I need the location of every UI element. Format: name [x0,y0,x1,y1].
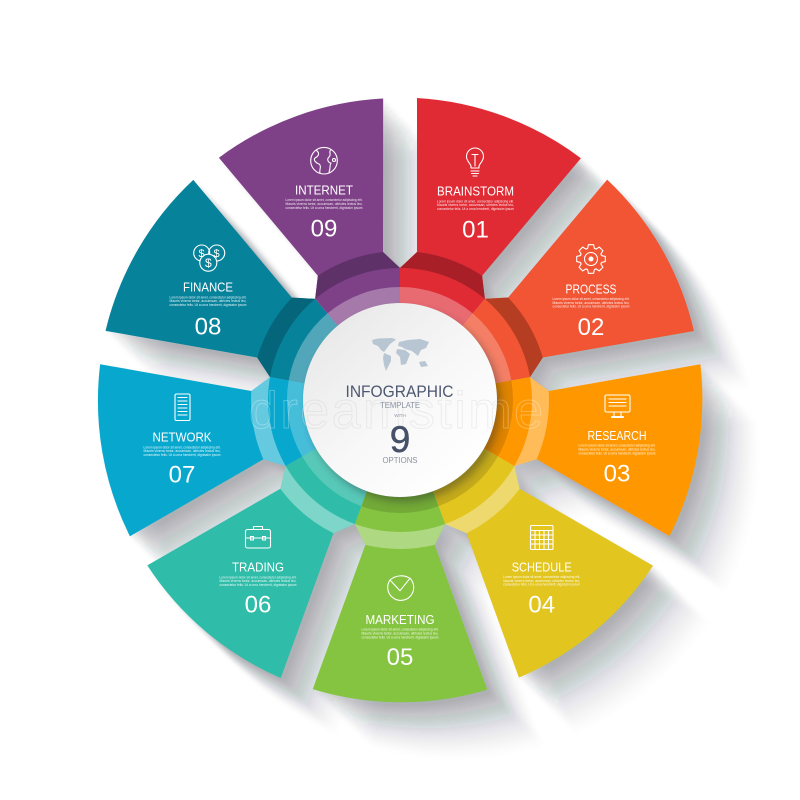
body text: research: Lorem ipsum dolor sit amet, consectetur adipiscing elit. [578,444,656,448]
number: 05: 05 [387,644,413,671]
label: options: OPTIONS [382,456,418,465]
panel: center circle [303,303,497,497]
body text: trading [220,575,296,587]
title: internet: INTERNET [295,184,353,198]
panel: 05 marketing [254,465,503,746]
body text: brainstorm: consectetur felis. Ut a urna hendrerit, dignissim ipsum [437,207,514,211]
number: 09: 09 [311,216,337,243]
body text: internet: consectetur felis. Ut a urna hendrerit, dignissim ipsum [286,206,362,210]
icon: light bulb [466,148,484,176]
number: 01: 01 [462,216,489,243]
icon: calendar [530,526,553,550]
body text: internet: Lorem ipsum dolor sit amet, consectetur adipiscing elit. [286,198,362,202]
body text: trading: Mauris viverra tortor, accumsan, ultricies lectus leo, [220,579,296,583]
label: with: WITH [394,413,406,418]
body text: process: Lorem ipsum dolor sit amet, consectetur adipiscing elit. [552,297,630,301]
body text: trading: Lorem ipsum dolor sit amet, consectetur adipiscing elit. [220,575,296,579]
body text: schedule: consectetur felis. Ut a urna hendrerit, dignissim ipsum [503,583,580,587]
body text: trading: consectetur felis. Ut a urna hendrerit, dignissim ipsum [220,583,296,587]
icon: coins: $ [213,248,220,260]
body text: internet: Mauris viverra tortor, accumsan, ultricies lectus leo, [286,202,362,206]
watermark on circle: dreamstime [249,382,543,440]
subheading: template: TEMPLATE [380,401,420,410]
panel: 06 trading [127,403,376,684]
icon: pie chart [388,576,414,600]
number: 07: 07 [169,462,195,489]
body text: marketing: Lorem ipsum dolor sit amet, consectetur adipiscing elit. [362,628,438,632]
title: brainstorm: BRAINSTORM [437,185,514,199]
number: 9: 9 [390,419,410,460]
panel: 02 process [444,169,733,463]
body text: internet [286,198,362,210]
body text: network: Mauris viverra tortor, accumsan, ultricies lectus leo, [144,449,220,453]
icon: monitor [605,395,630,417]
icon: coins [194,245,225,271]
title: finance: FINANCE [183,281,233,295]
panel: 03 research [468,348,729,566]
body text: research [578,444,656,455]
body text: network: consectetur felis. Ut a urna hendrerit, dignissim ipsum [144,453,220,457]
number: 06: 06 [245,592,271,619]
body text: research: consectetur felis. Ut a urna hendrerit, dignissim ipsum [578,451,656,455]
icon: coins: $ [205,256,212,270]
body text: schedule: Lorem ipsum dolor sit amet, consectetur adipiscing elit. [503,575,580,579]
heading: infographic: INFOGRAPHIC [346,383,454,401]
body text: research: Mauris viverra tortor, accumsan, ultricies lectus leo, [578,448,656,452]
number: 02: 02 [578,314,604,341]
body text: process [552,297,630,309]
title: network: NETWORK [152,431,212,445]
title: process: PROCESS [566,282,616,296]
body text: brainstorm: Mauris viverra tortor, accumsan, ultricies lectus leo, [437,203,514,207]
body text: network: Lorem ipsum dolor sit amet, consectetur adipiscing elit. [144,445,220,449]
body text: brainstorm [437,199,514,211]
panel: 04 schedule [369,434,662,708]
title: schedule: SCHEDULE [512,560,572,574]
body text: marketing: Mauris viverra tortor, accumsan, ultricies lectus leo, [362,632,438,636]
body text: finance: Mauris viverra tortor, accumsan, ultricies lectus leo, [170,299,246,303]
body text: finance: consectetur felis. Ut a urna hendrerit, dignissim ipsum [170,303,246,307]
panel: 07 network [48,278,340,551]
icon: device list [175,394,190,420]
body text: finance: Lorem ipsum dolor sit amet, consectetur adipiscing elit. [170,295,246,299]
number: 04: 04 [528,592,555,619]
center circle shadow [307,308,501,502]
body text: schedule: Mauris viverra tortor, accumsan, ultricies lectus leo, [503,579,580,583]
title: marketing: MARKETING [366,613,434,627]
icon: briefcase [246,526,270,548]
watermark on wheel: dreamstime [249,382,543,440]
number: 03: 03 [604,461,630,488]
body text: marketing: consectetur felis. Ut a urna hendrerit, dignissim ipsum [362,635,438,639]
panel: 01 brainstorm [400,98,581,331]
body text: schedule [503,575,580,587]
panel: 08 finance [103,169,364,388]
body text: network [144,445,220,457]
icon: gear [577,245,605,273]
body text: process: consectetur felis. Ut a urna hendrerit, dignissim ipsum [552,305,630,309]
body text: process: Mauris viverra tortor, accumsan, ultricies lectus leo, [552,301,630,305]
body text: brainstorm: Lorem ipsum dolor sit amet, consectetur adipiscing elit. [437,199,514,203]
panel: 09 internet [206,52,494,347]
icon: world map [372,338,429,371]
icon: coins: $ [198,248,205,260]
body text: marketing [362,628,438,639]
title: research: RESEARCH [588,429,646,443]
title: trading: TRADING [232,561,284,575]
icon: globe [311,147,337,174]
body text: finance [170,295,246,307]
number: 08: 08 [195,313,221,340]
